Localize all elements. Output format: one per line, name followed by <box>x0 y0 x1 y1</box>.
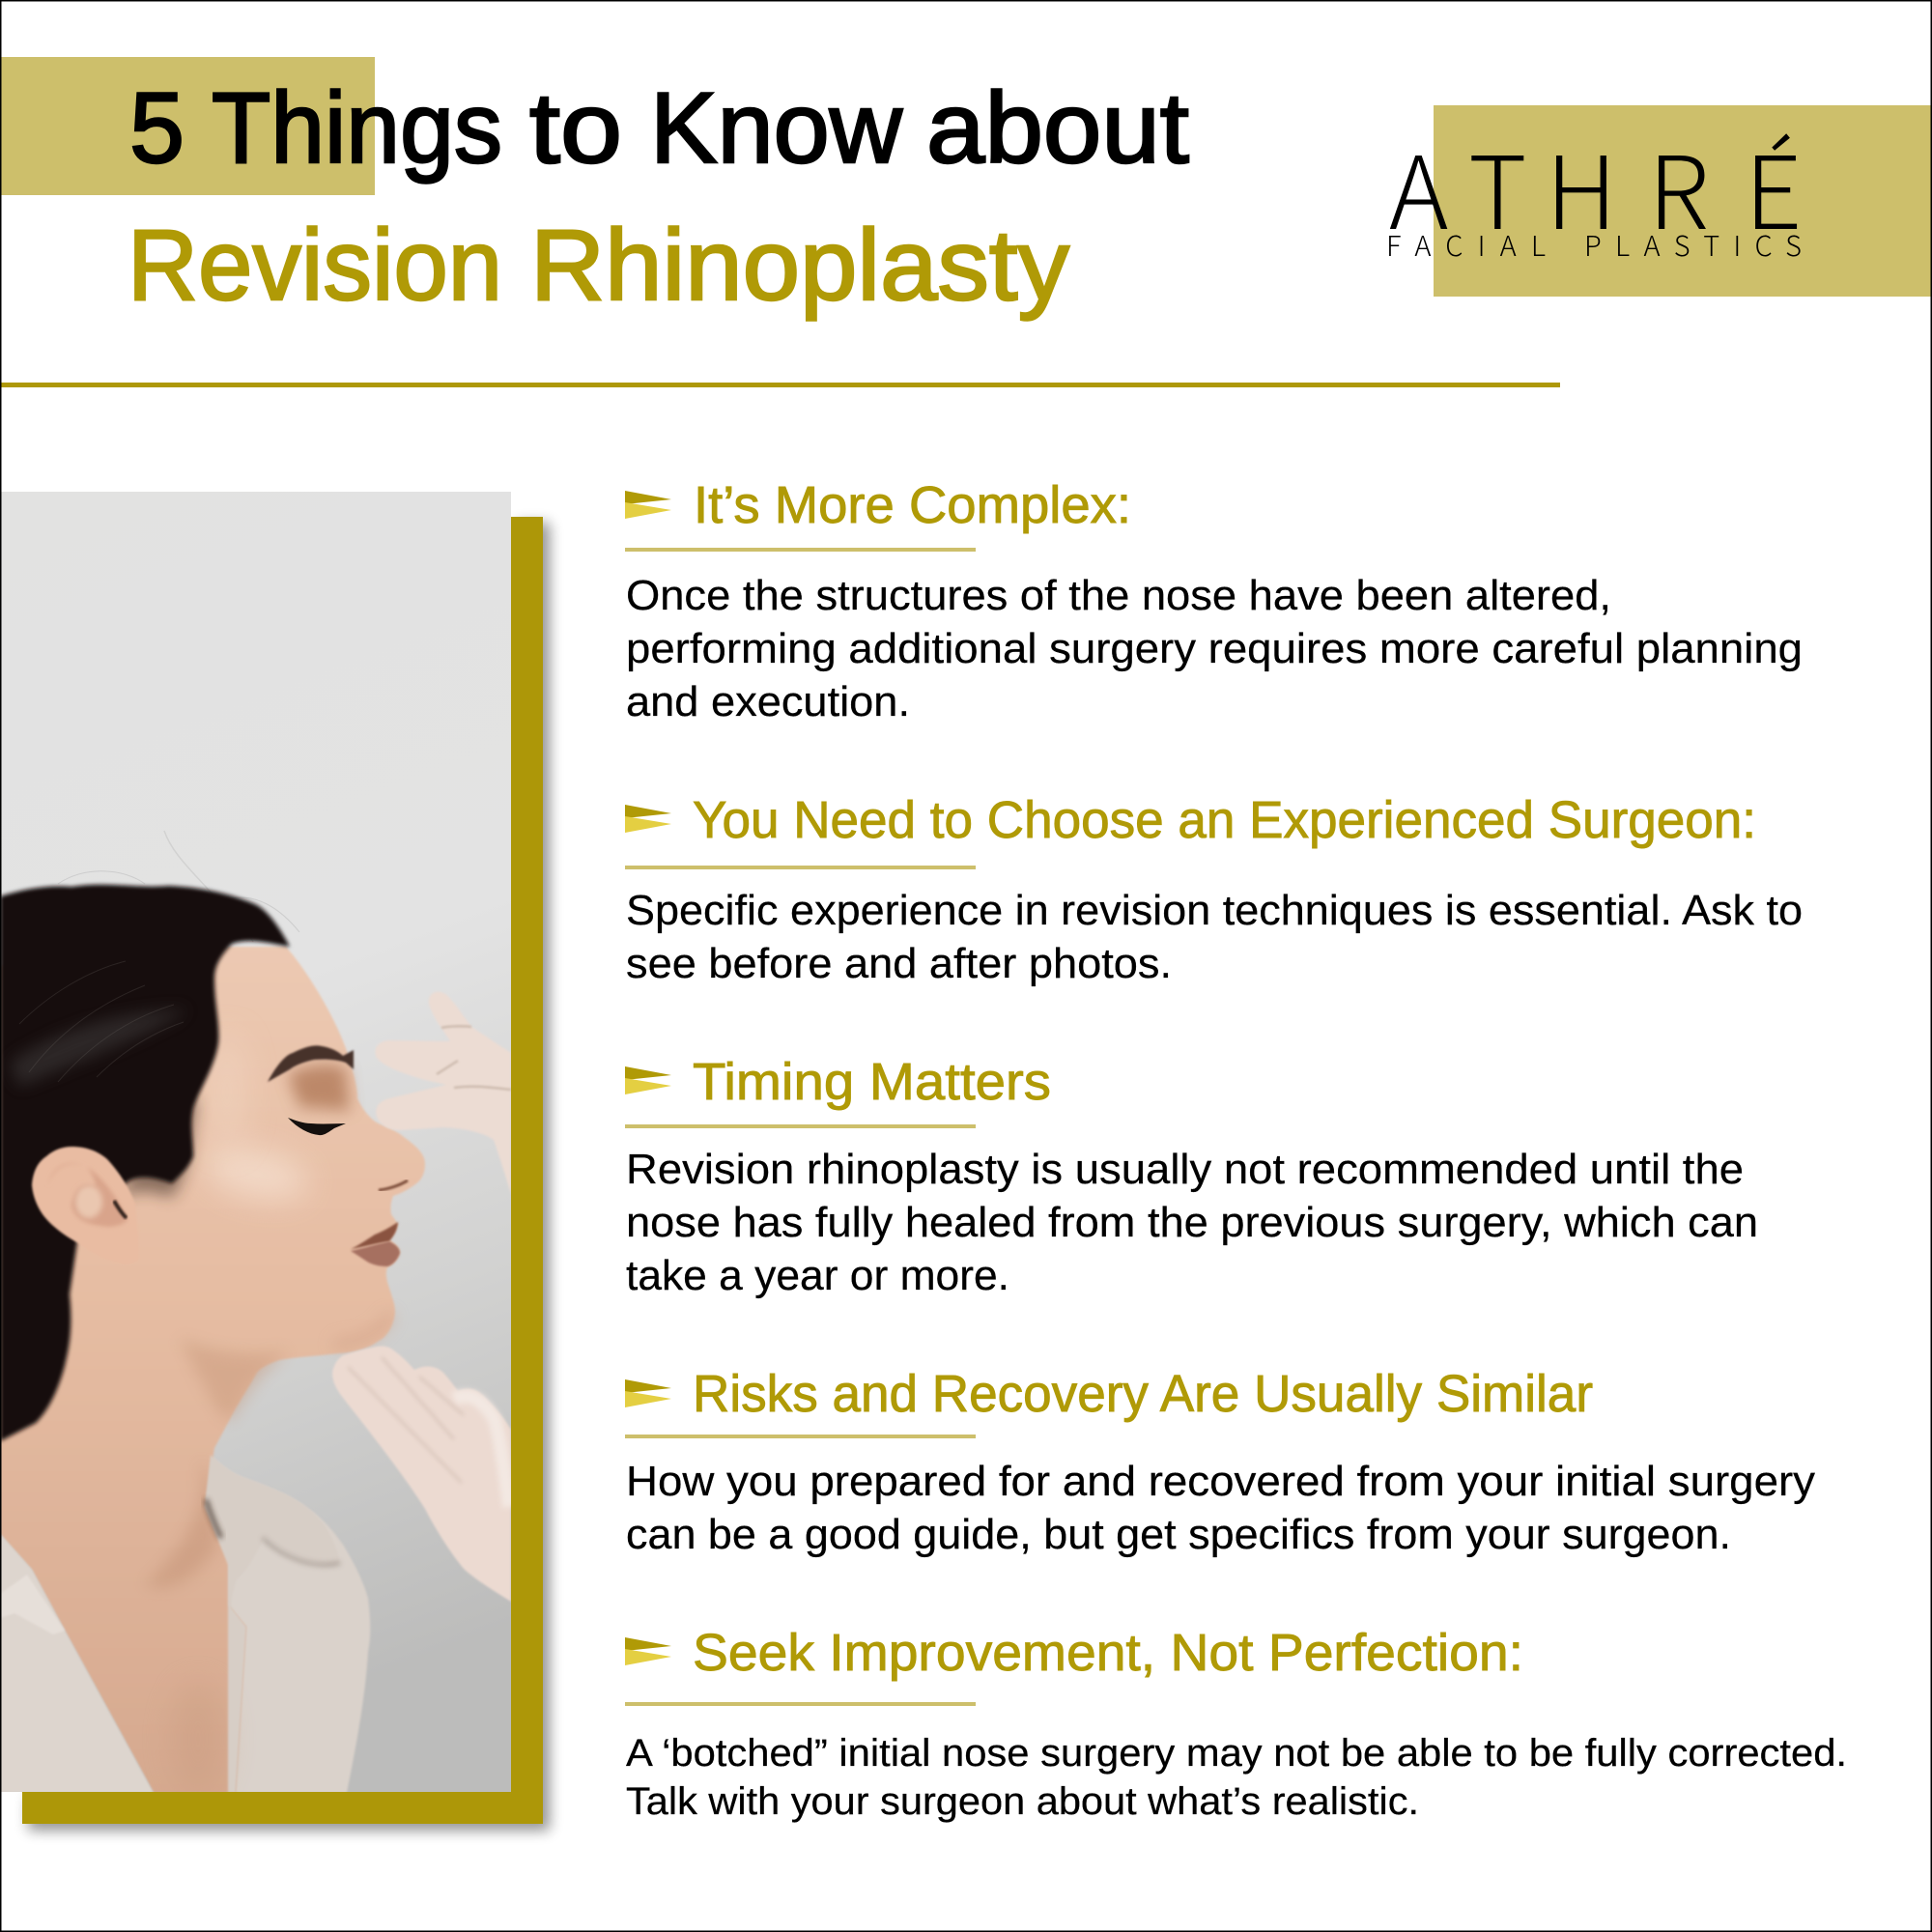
gold frame <box>22 517 543 1824</box>
section 3 <box>625 1053 1758 1299</box>
shirt, back of collar and shoulder <box>231 1515 371 1792</box>
body text: Once the structures of the nose have been altered, <box>626 572 1611 619</box>
heading: You Need to Choose an Experienced Surgeon: <box>693 791 1756 849</box>
photo: woman in profile with gloved hands <box>0 492 511 1797</box>
body text: performing additional surgery requires more careful planning <box>626 625 1803 672</box>
body text <box>626 1458 1815 1558</box>
section 5 <box>625 1624 1847 1823</box>
logo: Athré Facial Plastics: PLASTICS <box>1584 224 1802 265</box>
icon: pennant arrow <box>625 805 671 833</box>
header divider <box>0 383 1560 387</box>
title: about <box>926 72 1189 185</box>
header <box>0 57 1932 387</box>
body text: take a year or more. <box>626 1252 1009 1299</box>
shirt, front <box>0 1455 340 1793</box>
body text <box>626 572 1803 725</box>
heading: It’s More Complex: <box>694 476 1131 534</box>
heading rule <box>625 866 976 869</box>
ear <box>30 1145 133 1244</box>
title: Know <box>650 72 903 185</box>
body text: Talk with your surgeon about what’s realistic. <box>626 1780 1419 1823</box>
body text: and execution. <box>626 678 910 725</box>
logo: Athré Facial Plastics <box>1386 105 1932 297</box>
body text <box>626 1732 1847 1823</box>
section 2 <box>625 791 1803 987</box>
icon: pennant arrow <box>625 1379 671 1407</box>
title <box>128 72 1189 322</box>
icon: pennant arrow <box>625 491 671 519</box>
eye shadow, brow, eye <box>268 1045 354 1135</box>
gloved lower hand <box>332 1347 511 1602</box>
heading rule <box>625 548 976 552</box>
heading rule <box>625 1702 976 1706</box>
icon: pennant arrow <box>625 1637 671 1665</box>
skin shading <box>153 1065 397 1588</box>
title highlight block <box>0 57 375 195</box>
title: 5 <box>129 72 185 185</box>
body text: see before and after photos. <box>626 940 1172 987</box>
body text: A ‘botched” initial nose surgery may not be able to be fully corrected. <box>626 1732 1847 1775</box>
logo: Athré Facial Plastics: ATHRÉ <box>1389 112 1803 258</box>
body text: Specific experience in revision techniques is essential. Ask to <box>626 887 1803 934</box>
photo panel with gold frame <box>0 492 550 1831</box>
skin: face and neck <box>0 947 425 1793</box>
body text: nose has fully healed from the previous surgery, which can <box>626 1199 1758 1246</box>
body text <box>626 1146 1758 1299</box>
heading rule <box>625 1435 976 1438</box>
logo: Athré Facial Plastics: FACIAL <box>1386 224 1546 265</box>
section 1 <box>625 476 1803 725</box>
icon: pennant arrow <box>625 1066 671 1094</box>
heading: Risks and Recovery Are Usually Similar <box>693 1365 1593 1423</box>
section 4 <box>625 1365 1815 1558</box>
heading rule <box>625 1124 976 1128</box>
title: to <box>529 72 622 185</box>
heading: Seek Improvement, Not Perfection: <box>693 1624 1523 1682</box>
body text: Revision rhinoplasty is usually not recommended until the <box>626 1146 1744 1193</box>
body text: How you prepared for and recovered from your initial surgery <box>626 1458 1815 1505</box>
title: Revision <box>128 210 502 322</box>
hair <box>0 885 290 1441</box>
body text: can be a good guide, but get specifics from your surgeon. <box>626 1511 1731 1558</box>
title: Things <box>212 72 502 185</box>
frame shadow <box>28 523 550 1831</box>
body text <box>626 887 1803 987</box>
gloved upper hand <box>376 992 511 1194</box>
nostril and mouth <box>351 1180 408 1266</box>
title: Rhinoplasty <box>530 210 1069 322</box>
heading: Timing Matters <box>693 1053 1051 1111</box>
